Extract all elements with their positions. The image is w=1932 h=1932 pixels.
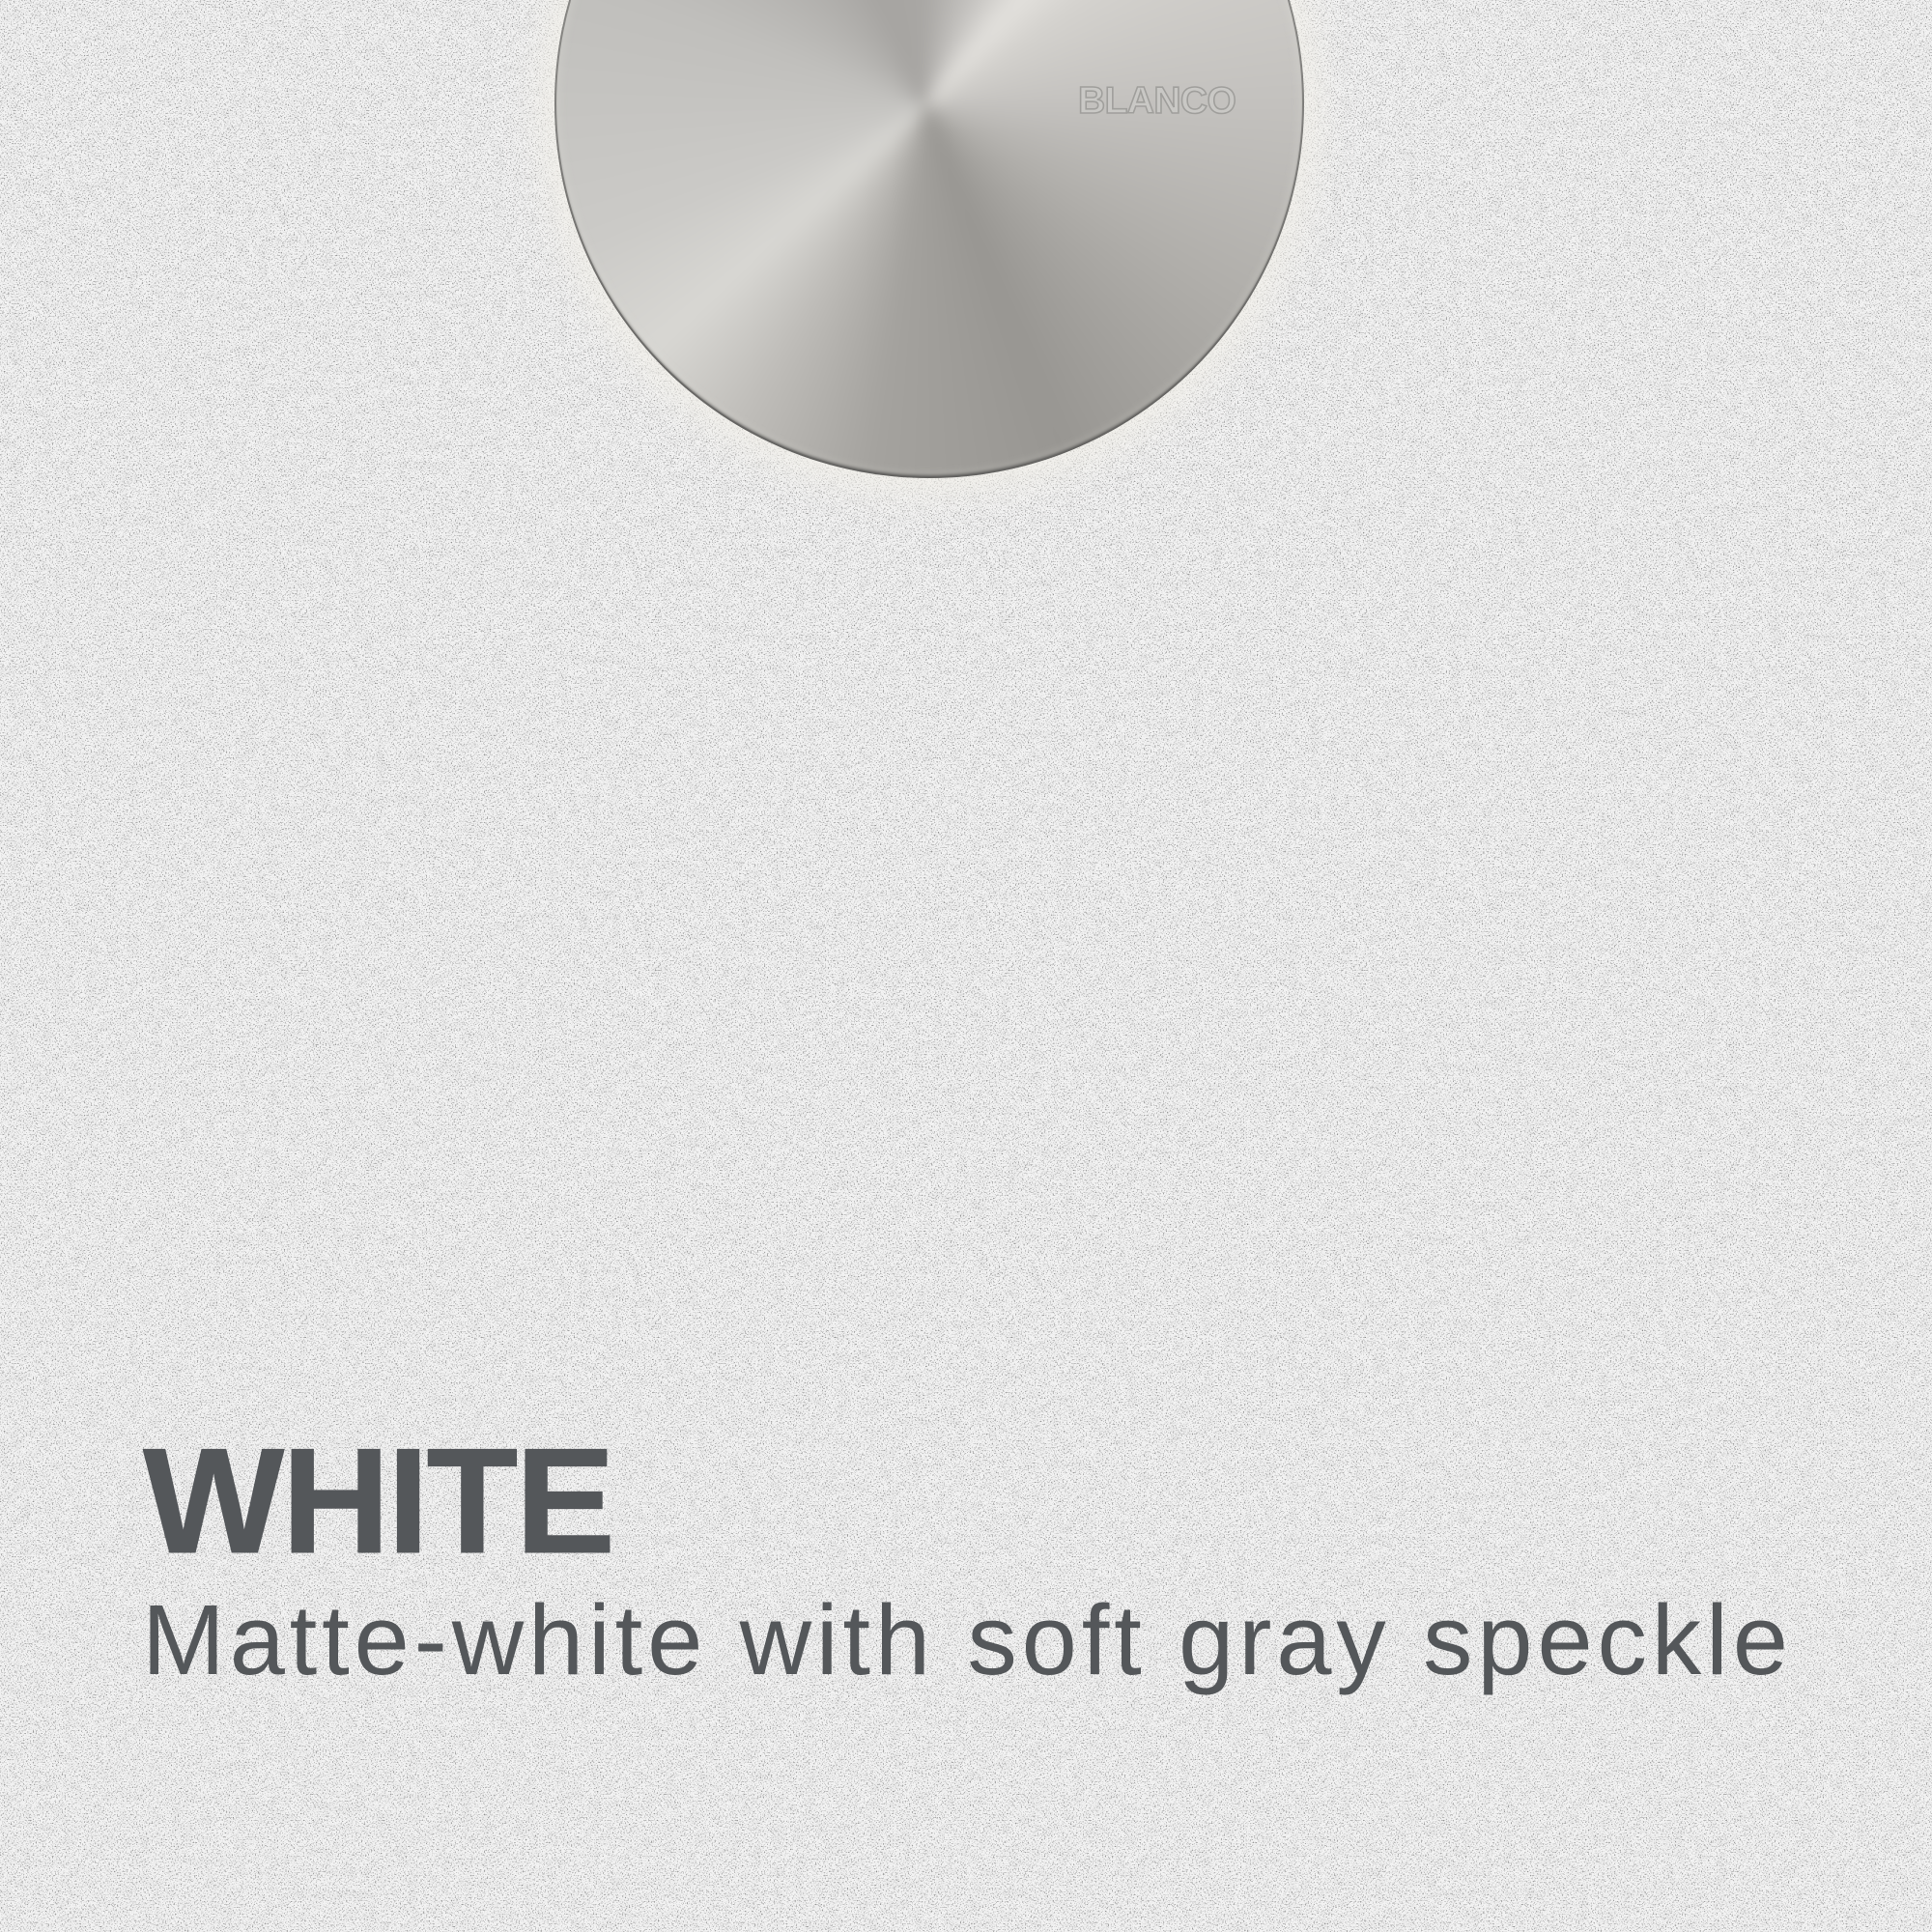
- embossed BLANCO logo: BLANCO: [1078, 80, 1236, 122]
- title: WHITE: [143, 1417, 612, 1584]
- disc rim: [554, 0, 1304, 478]
- soft halo around the disc: [554, 0, 1304, 478]
- disc face with radial brushed sheen: [526, 0, 1333, 507]
- subtitle: Matte-white with soft gray speckle: [142, 1584, 1793, 1695]
- brushed-steel drain cap disc: [554, 0, 1304, 478]
